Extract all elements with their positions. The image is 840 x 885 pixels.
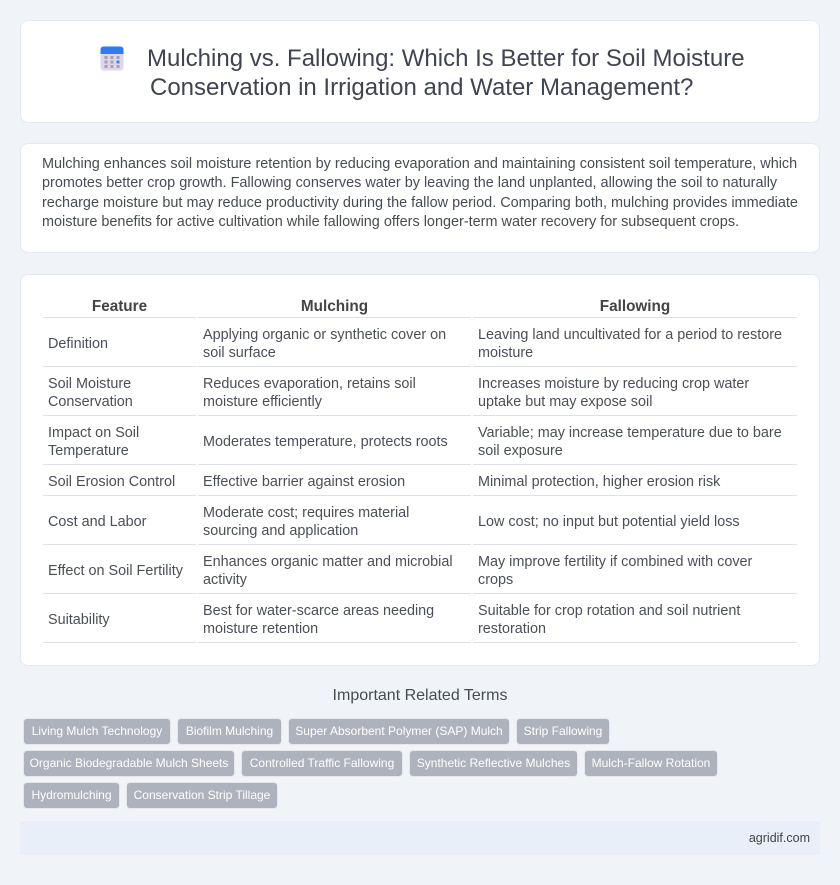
row: Soil Moisture Conservation: Conservation [48, 394, 133, 410]
row: Impact on Soil Temperature: Variable; may increase temperature due to bare [478, 425, 782, 441]
related terms tags: Conservation Strip Tillage [134, 788, 270, 802]
row: Soil Erosion Control [48, 474, 720, 490]
row: Cost and Labor: sourcing and application [203, 523, 358, 539]
title: Conservation in Irrigation and Water Management? [150, 74, 693, 101]
title: Mulching vs. Fallowing: Which Is Better for Soil Moisture [147, 45, 745, 72]
row: Soil Erosion Control: Effective barrier against erosion [203, 474, 405, 490]
header panel [20, 20, 820, 123]
row: Cost and Labor: Low cost; no input but potential yield loss [478, 514, 740, 530]
row: Impact on Soil Temperature: Impact on Soil [48, 425, 139, 441]
comparison table [43, 298, 797, 643]
row: Definition: Applying organic or synthetic cover on [203, 327, 446, 343]
related terms tags: Mulch-Fallow Rotation [592, 756, 710, 770]
related terms heading: Important Related Terms [333, 687, 507, 704]
row: Soil Moisture Conservation: moisture efficiently [203, 394, 322, 410]
icon: calendar [100, 46, 124, 70]
related terms tags: Living Mulch Technology [32, 724, 162, 738]
footer site name: agridif.com [749, 831, 810, 845]
row: Definition: soil surface [203, 345, 276, 361]
row: Definition: moisture [478, 345, 533, 361]
row: Suitability: moisture retention [203, 621, 318, 637]
comparison table: Mulching [301, 298, 368, 315]
intro paragraph [42, 156, 798, 230]
row: Effect on Soil Fertility: crops [478, 572, 513, 588]
intro paragraph: recharge moisture but may reduce productivity during the fallow period. Comparing both, mulching provides immediate [42, 195, 798, 211]
comparison table: Fallowing [600, 298, 670, 315]
row: Definition [48, 327, 782, 361]
related terms tags: Controlled Traffic Fallowing [250, 756, 394, 770]
related terms tags [23, 718, 718, 809]
row: Suitability: Best for water-scarce areas needing [203, 603, 434, 619]
row: Suitability: restoration [478, 621, 546, 637]
row: Impact on Soil Temperature: Moderates temperature, protects roots [203, 434, 448, 450]
comparison table: Feature [92, 298, 147, 315]
row: Effect on Soil Fertility [48, 554, 752, 588]
row: Effect on Soil Fertility: Enhances organic matter and microbial [203, 554, 453, 570]
row: Effect on Soil Fertility: activity [203, 572, 247, 588]
comparison table panel [20, 274, 820, 666]
row: Cost and Labor: Cost and Labor [48, 514, 146, 530]
related terms tags: Strip Fallowing [524, 724, 602, 738]
row: Soil Moisture Conservation: Increases moisture by reducing crop water [478, 376, 749, 392]
row: Suitability: Suitable for crop rotation and soil nutrient [478, 603, 740, 619]
intro paragraph: Mulching enhances soil moisture retention by reducing evaporation and maintaining consistent soil temperature, which [42, 156, 797, 172]
row: Suitability: Suitability [48, 612, 110, 628]
row: Soil Erosion Control: Minimal protection, higher erosion risk [478, 474, 720, 490]
row: Effect on Soil Fertility: Effect on Soil Fertility [48, 563, 183, 579]
intro text panel [20, 143, 820, 253]
table header [92, 298, 670, 315]
row: Soil Moisture Conservation: Reduces evaporation, retains soil [203, 376, 416, 392]
row: Soil Moisture Conservation: uptake but may expose soil [478, 394, 652, 410]
related terms tags: Organic Biodegradable Mulch Sheets [30, 756, 228, 770]
row: Cost and Labor [48, 505, 740, 539]
row: Soil Moisture Conservation [48, 376, 749, 410]
row: Cost and Labor: Moderate cost; requires material [203, 505, 409, 521]
title [147, 45, 745, 101]
related terms tags: Super Absorbent Polymer (SAP) Mulch [295, 724, 503, 738]
row: Impact on Soil Temperature: Temperature [48, 443, 129, 459]
row: Impact on Soil Temperature: soil exposure [478, 443, 563, 459]
related terms tags: Synthetic Reflective Mulches [417, 756, 570, 770]
row: Soil Erosion Control: Soil Erosion Control [48, 474, 175, 490]
related terms tags: Hydromulching [31, 788, 112, 802]
row: Effect on Soil Fertility: May improve fertility if combined with cover [478, 554, 752, 570]
row: Definition: Definition [48, 336, 108, 352]
row: Impact on Soil Temperature [48, 425, 782, 459]
footer bar [20, 821, 820, 855]
related terms tags: Biofilm Mulching [186, 724, 273, 738]
row: Soil Moisture Conservation: Soil Moisture [48, 376, 131, 392]
row: Definition: Leaving land uncultivated for a period to restore [478, 327, 782, 343]
intro paragraph: moisture benefits for active cultivation while fallowing offers longer-term water recovery for subsequent crops. [42, 214, 739, 230]
intro paragraph: promotes better crop growth. Fallowing conserves water by leaving the land unplanted, allowing the soil to naturally [42, 175, 777, 191]
row: Suitability [48, 603, 740, 637]
